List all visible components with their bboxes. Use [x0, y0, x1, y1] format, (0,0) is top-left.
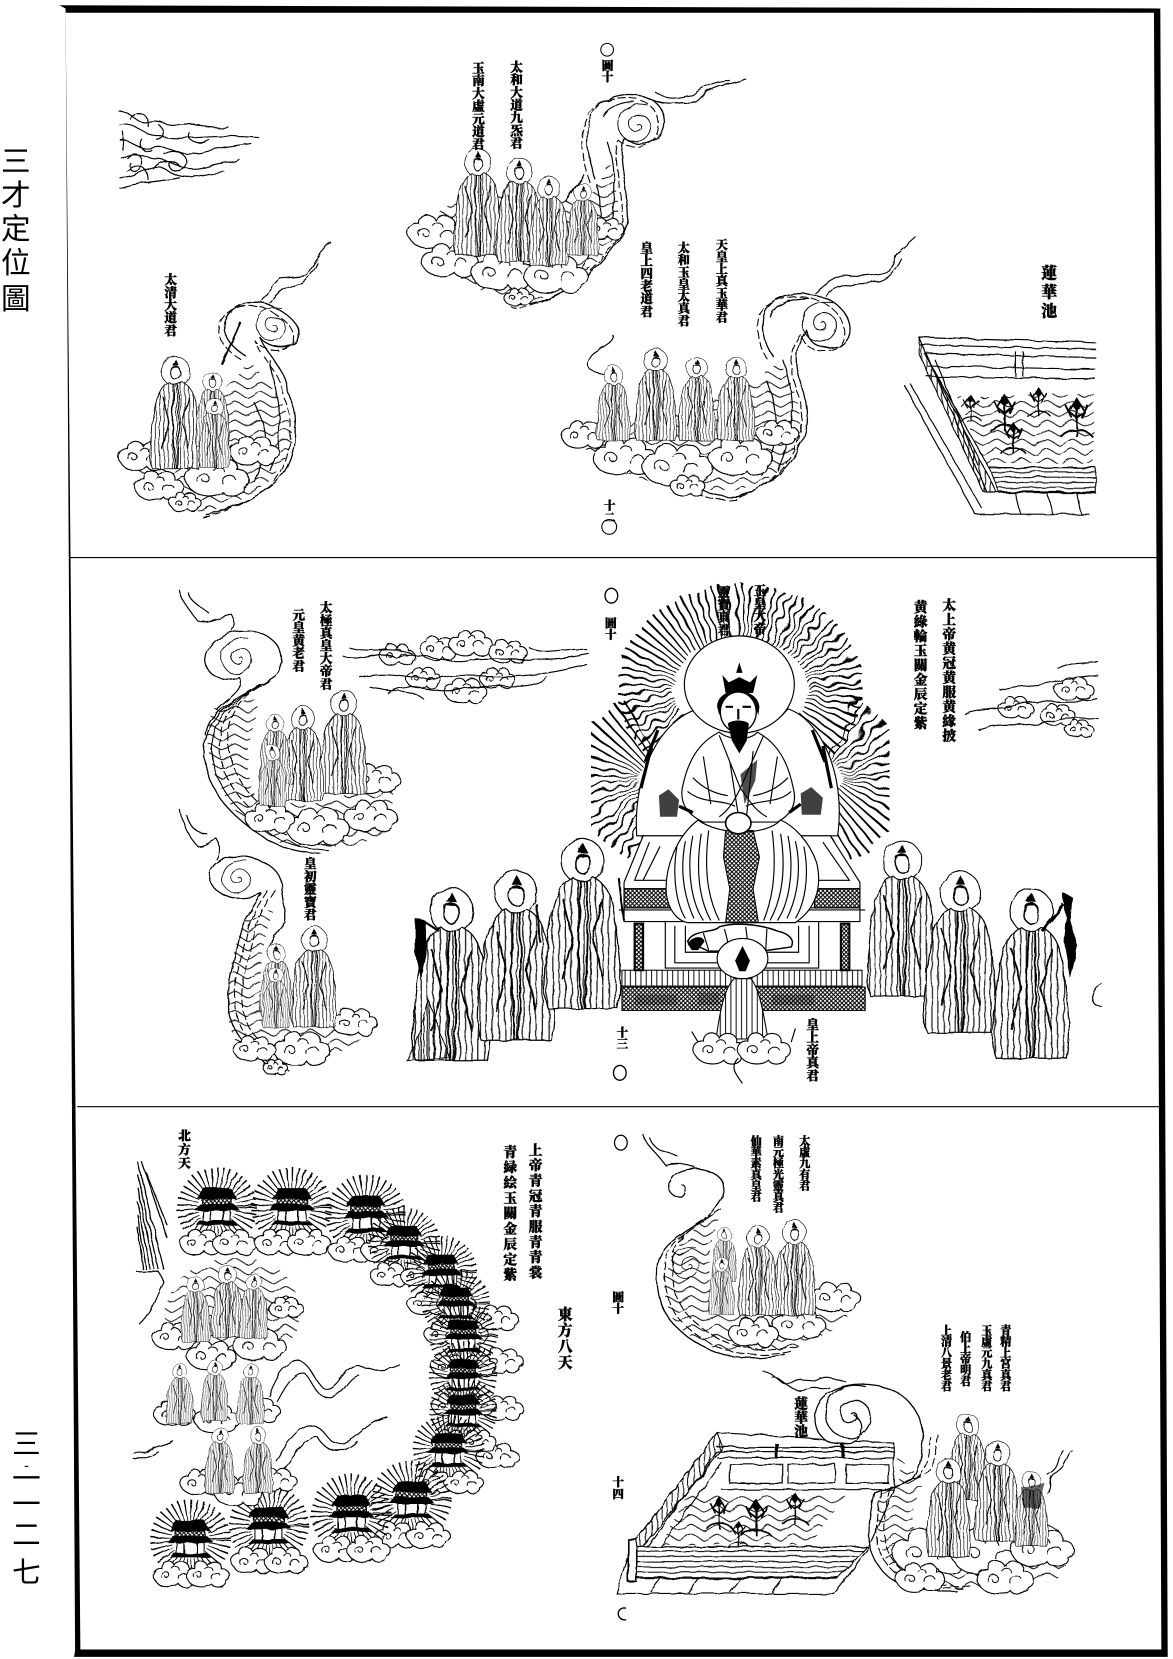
- left attendants: [407, 839, 624, 1061]
- print mark: top: 圖十: [604, 616, 617, 641]
- inscription: upper left group: 元皇黄老君: [290, 608, 305, 673]
- inscription: top centre columns: 玉南大虛元道君: [470, 61, 484, 152]
- head: [717, 691, 759, 753]
- inscription: lower right group: 玉虛元九真君: [979, 1323, 992, 1392]
- cloud group: lower left: [180, 809, 377, 1075]
- inscription: lower right group: 伯上帝明君: [959, 1330, 971, 1387]
- lotus pool: lower: [617, 1433, 894, 1593]
- inscription: above halo: 玉皇大帝: [751, 583, 766, 636]
- panel: middle register: [180, 583, 1102, 1083]
- print marks: 十四: [611, 1475, 624, 1500]
- lamps: [659, 787, 823, 817]
- caption: 蓮華池: 蓮華池: [1039, 263, 1057, 322]
- lotus cushion: [688, 924, 792, 951]
- inscription: upper right group: 太虛九有君: [798, 1134, 810, 1191]
- inscription: right group columns: 太和玉皇太真君: [674, 240, 690, 327]
- margin page number: 二: [12, 1520, 41, 1552]
- edge of flame rays: [134, 1162, 172, 1460]
- cloud: right edge: [965, 661, 1098, 737]
- inscription: top centre columns: 太和大道九炁君: [508, 59, 522, 151]
- label: 東方八天: 東方八天: [556, 1306, 572, 1370]
- inscription: right of aureole: 黄綠輪玉關金辰定紫: [912, 599, 928, 731]
- upper robe: [682, 732, 795, 822]
- inscription: right of aureole: 太上帝黄冠黄服黄緣披: [940, 597, 956, 743]
- inscription: east heaven columns: [501, 1143, 543, 1283]
- inscription: right of aureole: [912, 597, 956, 743]
- head halo: [684, 636, 794, 733]
- inscription: east heaven columns: 青緑絵玉關金辰定紫: [501, 1144, 517, 1283]
- cloud: upper left: [120, 112, 259, 188]
- print mark: top: [604, 588, 618, 641]
- print mark: bottom: 十二: [603, 499, 616, 523]
- margin title: 三: [1, 145, 31, 178]
- inscription: right group columns: 天皇上真玉華君: [712, 238, 728, 324]
- margin title: 才: [1, 179, 31, 212]
- margin page number: 一: [12, 1489, 41, 1521]
- inscription: right group columns: 皇上四老道君: [638, 240, 653, 319]
- cloud group with attendants: left: [118, 242, 331, 517]
- throne: [619, 836, 865, 1010]
- margin page number: 三: [12, 1429, 41, 1461]
- inscription: lower right group: [940, 1323, 1011, 1392]
- cloud group with four deities: right: [561, 237, 916, 500]
- print mark: bottom: [613, 1026, 628, 1080]
- caption: 蓮華池: 蓮華池: [792, 1396, 808, 1439]
- cloud: centre left: [343, 630, 589, 703]
- print mark: bottom: 十三: [615, 1026, 628, 1050]
- inscription: right group columns: [638, 238, 728, 327]
- inscription: upper left group: [290, 600, 332, 691]
- inscription: upper right group: [749, 1134, 810, 1214]
- print marks: [611, 1135, 627, 1620]
- lotus pool: upper right: [904, 338, 1096, 514]
- margin page number: -: [24, 1459, 29, 1475]
- label: 北方天: 北方天: [176, 1129, 190, 1171]
- inscription: below throne: 皇上帝真君: [804, 1017, 819, 1083]
- print mark: top: 圖十: [601, 58, 614, 83]
- print marks: 圖十: [611, 1290, 624, 1315]
- margin title: 圖: [1, 283, 31, 316]
- margin title: 定: [1, 213, 31, 246]
- cloud group: lower right: [763, 1371, 1074, 1594]
- inscription: top centre columns: [470, 59, 522, 152]
- cloud groups of the north: [152, 1258, 400, 1505]
- print mark: top: [601, 43, 614, 83]
- right attendants: [867, 841, 1102, 1058]
- inscription: upper left group: 太極真皇大帝君: [317, 600, 332, 691]
- print mark: bottom: [602, 499, 617, 534]
- panel: lower register: [134, 1129, 1074, 1620]
- cloud group: upper right: [643, 1134, 861, 1358]
- enthroned central deity: [619, 636, 865, 1083]
- inscription: upper right group: 仙華素真皇君: [749, 1134, 762, 1203]
- inscription: lower right group: 上清八景老君: [940, 1324, 952, 1392]
- crown: [722, 662, 757, 693]
- inscription: above halo: 靈寶真君: [715, 584, 730, 637]
- margin page number: 七: [12, 1557, 41, 1589]
- inscription: lower right group: 青精上宮真君: [998, 1323, 1011, 1392]
- ring of flaming pavilions: [153, 1178, 524, 1587]
- cloud group: upper left: [180, 590, 400, 854]
- inscription: left group: 太清大道君: [162, 272, 177, 338]
- aureole of flame rays: [605, 592, 876, 852]
- inscription: lower left group: 皇初靈寶君: [302, 856, 316, 922]
- body halo: [636, 709, 839, 836]
- cloud group with attendants: top centre: [408, 78, 746, 308]
- inscription: east heaven columns: 上帝青冠青服青青裳: [527, 1143, 543, 1281]
- margin title: 位: [1, 247, 31, 280]
- margin page number: 一: [12, 1464, 41, 1496]
- lower robe: [666, 820, 819, 923]
- panel: upper register: [118, 43, 1096, 534]
- inscription: above halo: [715, 583, 766, 637]
- front attendant on cloud: [692, 938, 795, 1083]
- inscription: upper right group: 南元極光靈真君: [771, 1134, 784, 1214]
